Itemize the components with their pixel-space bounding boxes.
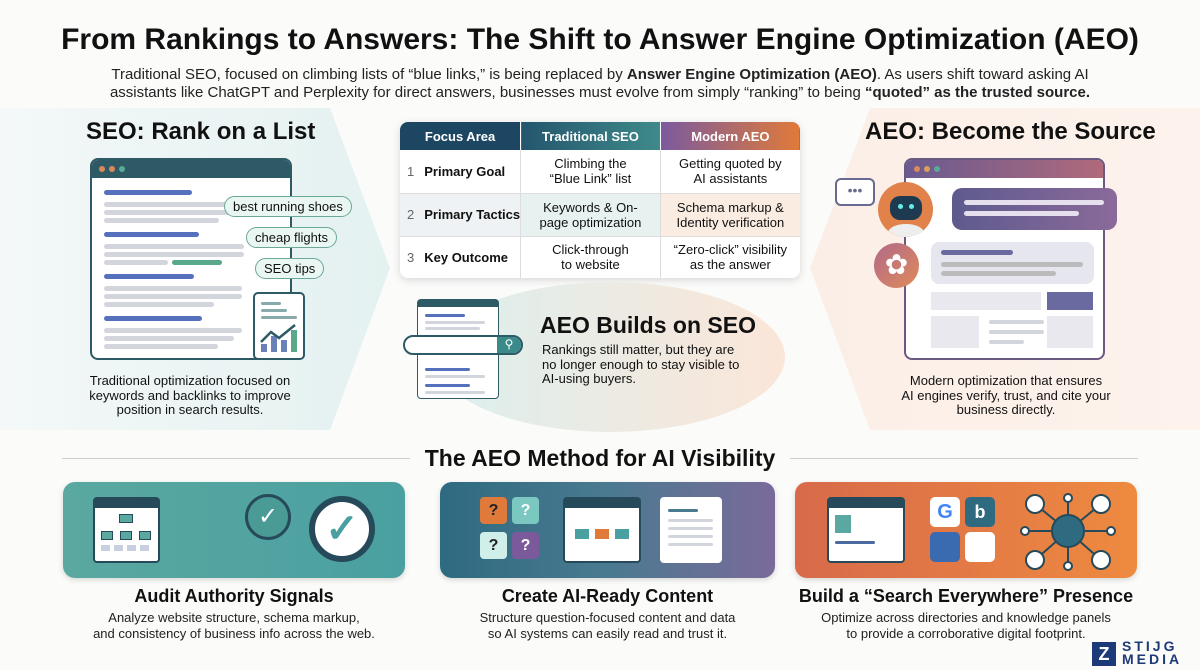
AEO browser illustration xyxy=(835,158,1117,360)
card title: audit: Audit Authority Signals xyxy=(134,586,334,606)
card desc: audit: Analyze website structure, schema markup, xyxy=(108,610,360,625)
SEO caption: Traditional optimization focused on keywords and backlinks to improve position in search results. xyxy=(89,373,291,417)
card desc: audit: and consistency of business info across the web. xyxy=(93,626,375,641)
icon: robot xyxy=(878,182,933,237)
card: audit: ✓ xyxy=(258,503,278,530)
divider line xyxy=(62,458,1138,459)
comparison table: “Blue Link” list xyxy=(550,171,631,186)
subtitle xyxy=(110,66,1090,101)
panel: AEO builds on SEO xyxy=(403,282,785,432)
icon: ChatGPT logo: ✿ xyxy=(885,249,908,280)
comparison table: 1 Primary Goal xyxy=(407,164,505,179)
icon: browser with search bar xyxy=(417,299,499,399)
text: SEO tips xyxy=(264,261,315,276)
left panel background xyxy=(0,108,400,430)
comparison table: AI assistants xyxy=(694,171,767,186)
AEO caption: Modern optimization that ensures xyxy=(910,373,1102,388)
icon: chat dots: ••• xyxy=(848,182,862,198)
comparison table: Modern AEO xyxy=(691,128,770,144)
subtitle: Traditional SEO, focused on climbing lists of “blue links,” is being replaced by Answer Engine Optimization (AEO). As users shift toward asking AI xyxy=(111,66,1089,83)
AEO caption xyxy=(901,373,1111,417)
comparison table: Getting quoted by xyxy=(679,156,782,171)
icon: ChatGPT logo xyxy=(874,243,919,288)
logo: MEDIA xyxy=(1122,651,1182,667)
heading: SEO: SEO: Rank on a List xyxy=(86,118,315,145)
card: content xyxy=(440,482,775,578)
callout: AI answer bubble xyxy=(952,188,1117,230)
card desc: presence: Optimize across directories and knowledge panels xyxy=(821,610,1111,625)
panel: AEO builds on SEO: ⚲ xyxy=(505,337,513,351)
logo: STIJG xyxy=(1122,638,1177,654)
SEO browser illustration xyxy=(90,158,305,360)
card desc: presence xyxy=(821,610,1111,641)
AEO caption: business directly. xyxy=(957,402,1055,417)
card: presence: b xyxy=(974,502,986,522)
card desc: audit xyxy=(93,610,375,641)
card desc: presence: to provide a corroborative digital footprint. xyxy=(846,626,1086,641)
card desc: content: Structure question-focused content and data xyxy=(480,610,735,625)
title: From Rankings to Answers: The Shift to Answer Engine Optimization (AEO) xyxy=(61,23,1139,56)
comparison table: page optimization xyxy=(539,214,641,230)
heading: AEO: AEO: Become the Source xyxy=(865,118,1156,145)
icon: chat dots xyxy=(835,178,875,206)
subtitle: assistants like ChatGPT and Perplexity for direct answers, businesses must evolve from simply “ranking” to being “quoted” as the trusted source. xyxy=(110,84,1090,101)
comparison table: 3 Key Outcome xyxy=(407,250,508,265)
card title: presence: Build a “Search Everywhere” Presence xyxy=(799,586,1133,606)
right panel background xyxy=(800,108,1200,430)
comparison table xyxy=(400,122,800,278)
comparison table: Focus Area xyxy=(425,128,495,144)
card: presence xyxy=(795,482,1137,578)
card: content: ? xyxy=(489,537,498,554)
heading: AEO method: The AEO Method for AI Visibility xyxy=(425,445,775,471)
card desc: content: so AI systems can easily read and trust it. xyxy=(488,626,727,641)
card: content: ? xyxy=(521,502,530,519)
comparison table: Schema markup & xyxy=(677,200,784,214)
card: presence: G xyxy=(937,501,953,523)
comparison table: Click-through xyxy=(552,242,629,257)
card title: content: Create AI-Ready Content xyxy=(502,586,713,606)
text: builds on SEO: Rankings still matter, but they are no longer enough to stay visible to AI-using buyers. xyxy=(542,342,739,386)
icon: report document xyxy=(253,292,305,360)
AEO caption: AI engines verify, trust, and cite your xyxy=(901,388,1111,402)
comparison table: as the answer xyxy=(690,257,771,272)
comparison table: Keywords & On- xyxy=(543,200,638,214)
card: content: ? xyxy=(521,537,530,554)
card desc: content xyxy=(480,610,736,641)
comparison table: Traditional SEO xyxy=(542,128,639,144)
comparison table: to website xyxy=(561,257,620,272)
logo xyxy=(1092,638,1182,667)
comparison table: Climbing the xyxy=(554,156,627,171)
card: audit: ✓ xyxy=(325,507,359,551)
heading: AEO Builds on SEO: AEO Builds on SEO xyxy=(540,312,756,338)
card: audit xyxy=(63,482,405,578)
keyword bubbles xyxy=(224,196,352,217)
comparison table: 2 Primary Tactics xyxy=(407,207,520,222)
keyword bubbles: best running shoes xyxy=(233,199,343,214)
text: cheap flights xyxy=(255,230,328,245)
card: content: ? xyxy=(489,502,498,519)
comparison table: “Zero-click” visibility xyxy=(674,242,787,257)
logo: Z xyxy=(1098,644,1110,664)
comparison table: Identity verification xyxy=(677,214,784,230)
